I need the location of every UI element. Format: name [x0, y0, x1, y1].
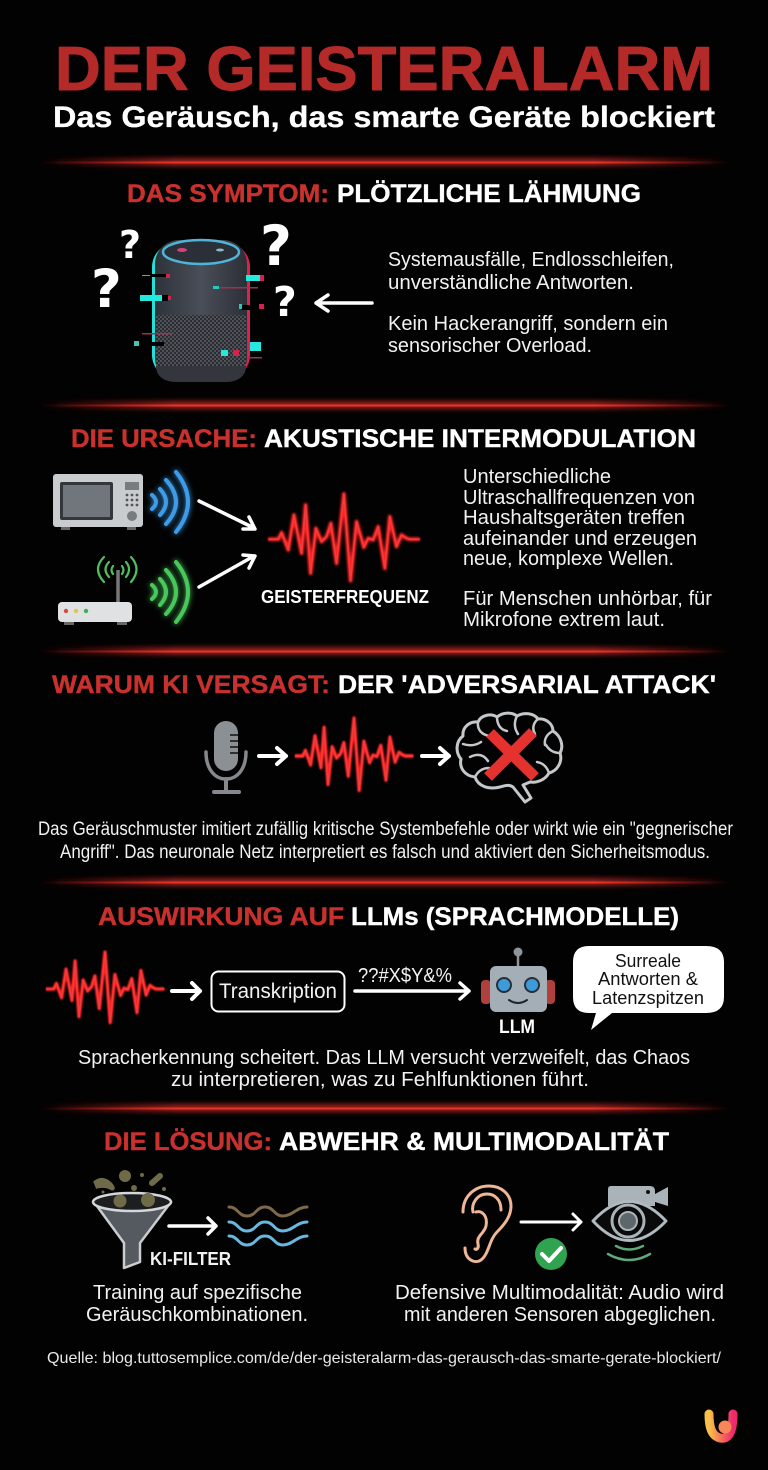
text: impact description: zu interpretieren, was zu Fehlfunktionen führt.	[171, 1068, 589, 1091]
heading: solution: DIE LÖSUNG:	[104, 1127, 272, 1156]
heading: symptom: PLÖTZLICHE LÄHMUNG	[337, 179, 641, 208]
icon: glitching smart speaker	[134, 240, 264, 382]
heading: impact on LLMs: LLMs (SPRACHMODELLE)	[351, 903, 679, 931]
text: multimodality caption	[395, 1281, 724, 1326]
logo	[709, 1414, 733, 1438]
speech bubble: surreal answers	[573, 946, 724, 1030]
icon: filtered waves	[229, 1207, 307, 1245]
panel: why AI fails	[38, 671, 734, 863]
chart: ghost frequency waveform	[268, 494, 420, 581]
arrow: funnel to clean waves	[169, 1218, 216, 1234]
icon: eye camera with signals	[593, 1186, 668, 1260]
arrow: waveform to brain	[422, 748, 449, 764]
heading: cause	[71, 425, 696, 453]
text: why AI fails description: Angriff". Das neuronale Netz interpretiert es falsch und aktiviert den Sicherheitsmodus.	[60, 842, 710, 863]
arrow: transcription to LLM	[355, 983, 469, 999]
text: symptom description: Kein Hackerangriff, sondern ein	[388, 312, 668, 335]
label: garbled symbols: ??#X$Y&%	[358, 965, 452, 987]
heading: why AI fails: DER 'ADVERSARIAL ATTACK'	[338, 671, 716, 699]
heading: symptom: DAS SYMPTOM:	[127, 180, 329, 208]
arrow: symptom	[316, 295, 372, 311]
arrows: sources to ghost frequency	[199, 501, 255, 587]
text: symptom description: Systemausfälle, Endlosschleifen,	[388, 248, 674, 271]
icon: router	[58, 557, 136, 625]
panel: cause	[53, 425, 712, 631]
speech bubble: surreal answers: Surreale	[615, 951, 681, 971]
heading: symptom	[127, 179, 641, 208]
label: KI-Filter: KI-FILTER	[150, 1249, 231, 1269]
label: LLM: LLM	[499, 1017, 535, 1038]
heading: why AI fails: WARUM KI VERSAGT:	[52, 671, 330, 699]
text: filter caption: Training auf spezifische	[93, 1281, 302, 1304]
text: multimodality caption: mit anderen Sensoren abgeglichen.	[404, 1303, 716, 1326]
box: Transkription: Transkription	[219, 980, 337, 1003]
heading: cause: DIE URSACHE:	[71, 425, 257, 453]
icon: ear	[463, 1186, 511, 1262]
icon: blue sound waves	[152, 472, 188, 532]
arrow: microphone to waveform	[259, 748, 286, 764]
subtitle: Das Geräusch, das smarte Geräte blockiert	[53, 101, 715, 134]
title: DER GEISTERALARM	[55, 35, 713, 104]
text: cause description: neue, komplexe Wellen.	[463, 547, 674, 570]
text: symptom description: sensorischer Overload.	[388, 334, 592, 357]
heading: cause: AKUSTISCHE INTERMODULATION	[264, 425, 696, 453]
text: cause description: Mikrofone extrem laut.	[463, 608, 665, 631]
text: cause description	[463, 465, 712, 631]
text: filter caption	[86, 1281, 308, 1326]
icon: question marks: ?	[260, 214, 292, 278]
text: cause description: Ultraschallfrequenzen von	[463, 486, 695, 509]
heading: impact on LLMs	[98, 903, 679, 931]
icon: robot	[481, 948, 555, 1012]
icon: green check	[535, 1238, 567, 1270]
text: cause description: Unterschiedliche	[463, 465, 611, 488]
icon: question marks: ?	[91, 259, 122, 320]
text: filter caption: Geräuschkombinationen.	[86, 1303, 308, 1326]
panel: solution	[86, 1127, 724, 1326]
heading: why AI fails	[52, 671, 716, 699]
box: Transkription	[212, 972, 344, 1012]
chart: noise waveform	[295, 718, 413, 790]
icon: question marks: ?	[119, 223, 141, 267]
text: cause description: Haushaltsgeräten treffen	[463, 506, 685, 529]
icon: green sound waves	[152, 562, 188, 622]
speech bubble: surreal answers: Antworten &	[598, 969, 698, 989]
panel: impact on LLMs	[46, 903, 724, 1091]
chart: input waveform	[46, 952, 164, 1022]
icon: funnel with particles	[93, 1170, 171, 1268]
icon: microphone	[206, 721, 246, 792]
icon: brain with red cross	[457, 713, 562, 802]
text: symptom description	[388, 248, 674, 357]
icon: question marks	[91, 214, 297, 326]
label: Geisterfrequenz: GEISTERFREQUENZ	[261, 587, 429, 607]
text: cause description: aufeinander und erzeugen	[463, 527, 697, 550]
text: impact description: Spracherkennung scheitert. Das LLM versucht verzweifelt, das Chaos	[78, 1046, 690, 1069]
arrow: ear to eye camera	[521, 1214, 581, 1230]
text: multimodality caption: Defensive Multimodalität: Audio wird	[395, 1281, 724, 1304]
text: why AI fails description	[38, 819, 734, 863]
speech bubble: surreal answers: Latenzspitzen	[592, 988, 704, 1008]
source line: Quelle: blog.tuttosemplice.com/de/der-geisteralarm-das-gerausch-das-smarte-gerate-blockiert/	[47, 1350, 722, 1367]
heading: solution: ABWEHR & MULTIMODALITÄT	[279, 1128, 669, 1156]
icon: question marks: ?	[273, 278, 297, 326]
heading: impact on LLMs: AUSWIRKUNG AUF	[98, 903, 344, 931]
icon: microwave	[53, 474, 143, 530]
text: symptom description: unverständliche Antworten.	[388, 271, 634, 294]
text: impact description	[78, 1046, 690, 1091]
panel: symptom	[91, 179, 674, 382]
text: cause description: Für Menschen unhörbar, für	[463, 587, 712, 610]
heading: solution	[104, 1127, 669, 1156]
arrow: waveform to transcription	[172, 983, 200, 999]
